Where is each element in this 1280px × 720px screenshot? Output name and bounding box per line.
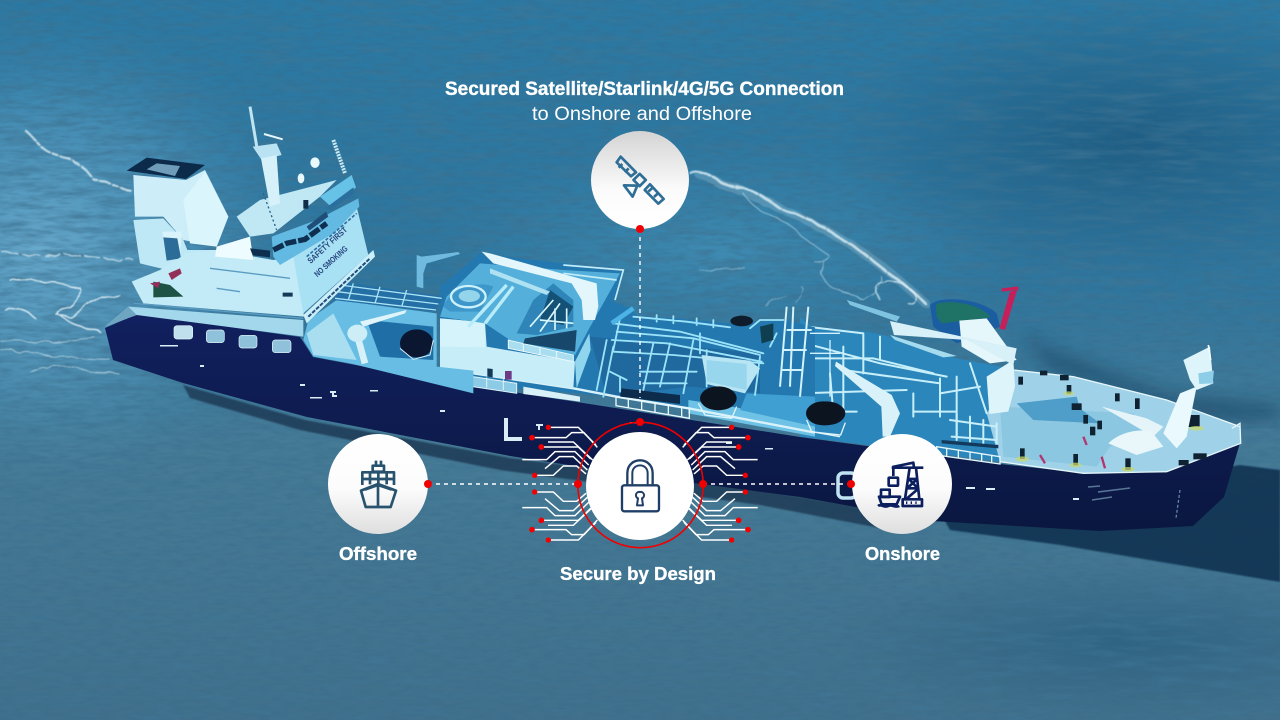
stern deck — [105, 307, 303, 337]
fender — [807, 401, 845, 425]
title: to Onshore and Offshore — [532, 104, 752, 125]
small crane — [835, 362, 900, 437]
ship: stern and superstructure — [105, 107, 473, 393]
node: satellite — [591, 131, 689, 233]
label: secure by design: Secure by Design — [560, 563, 716, 584]
tug — [930, 299, 1000, 343]
bridge top — [237, 180, 337, 237]
ship shadow on water — [183, 330, 1280, 582]
aft decks — [132, 250, 304, 317]
circuit traces — [522, 425, 758, 543]
deck base — [440, 253, 815, 432]
foredeck — [987, 370, 1241, 473]
railing — [1000, 370, 1241, 473]
node: offshore — [328, 434, 432, 534]
tower — [780, 307, 840, 397]
deck fittings — [1040, 437, 1105, 468]
manifold block left — [440, 318, 575, 388]
recess deck — [303, 300, 473, 393]
fore mast — [1163, 387, 1197, 448]
ship: stern and superstructure: NO SMOKING — [312, 244, 350, 279]
red ring — [578, 422, 703, 548]
front face — [293, 207, 368, 313]
aft deck strip rails — [440, 372, 517, 393]
mast — [250, 107, 257, 150]
fenders — [700, 386, 737, 410]
safety sign text: SAFETY FIRST — [305, 225, 349, 265]
ship: bow section — [800, 288, 1241, 473]
dark hold — [620, 388, 680, 404]
icon: satellite — [617, 157, 664, 204]
connector: lock to onshore — [703, 483, 851, 485]
hull — [105, 314, 1240, 531]
ship: midship section — [440, 252, 841, 437]
node: onshore — [847, 434, 952, 534]
label: onshore: Onshore — [865, 543, 940, 564]
icon: port crane — [878, 463, 923, 507]
rack pipes — [800, 327, 997, 443]
main crane — [890, 321, 1017, 365]
bollards — [1018, 371, 1207, 470]
light box — [702, 355, 760, 393]
title — [445, 79, 844, 125]
node: secure by design — [522, 418, 758, 548]
connector: offshore to lock — [428, 483, 578, 485]
catwalk — [333, 282, 443, 312]
rack base — [800, 317, 1013, 462]
ship — [105, 107, 1241, 531]
rail — [616, 397, 689, 418]
deck crane small — [417, 252, 460, 288]
lower deck strip — [688, 400, 815, 437]
label: offshore: Offshore — [339, 543, 417, 564]
funnel — [133, 170, 228, 247]
icon: ship — [361, 461, 396, 507]
connector: vertical dashed line — [639, 229, 641, 398]
hull markings — [160, 345, 1180, 518]
racks — [597, 315, 783, 397]
upper platform — [440, 263, 620, 355]
wake: left side — [0, 130, 135, 375]
title: Secured Satellite/Starlink/4G/5G Connection — [445, 79, 844, 100]
wake: right side — [690, 172, 925, 305]
gangway — [303, 250, 375, 323]
ports — [174, 326, 291, 353]
icon: padlock — [622, 460, 659, 511]
crane — [482, 252, 598, 320]
